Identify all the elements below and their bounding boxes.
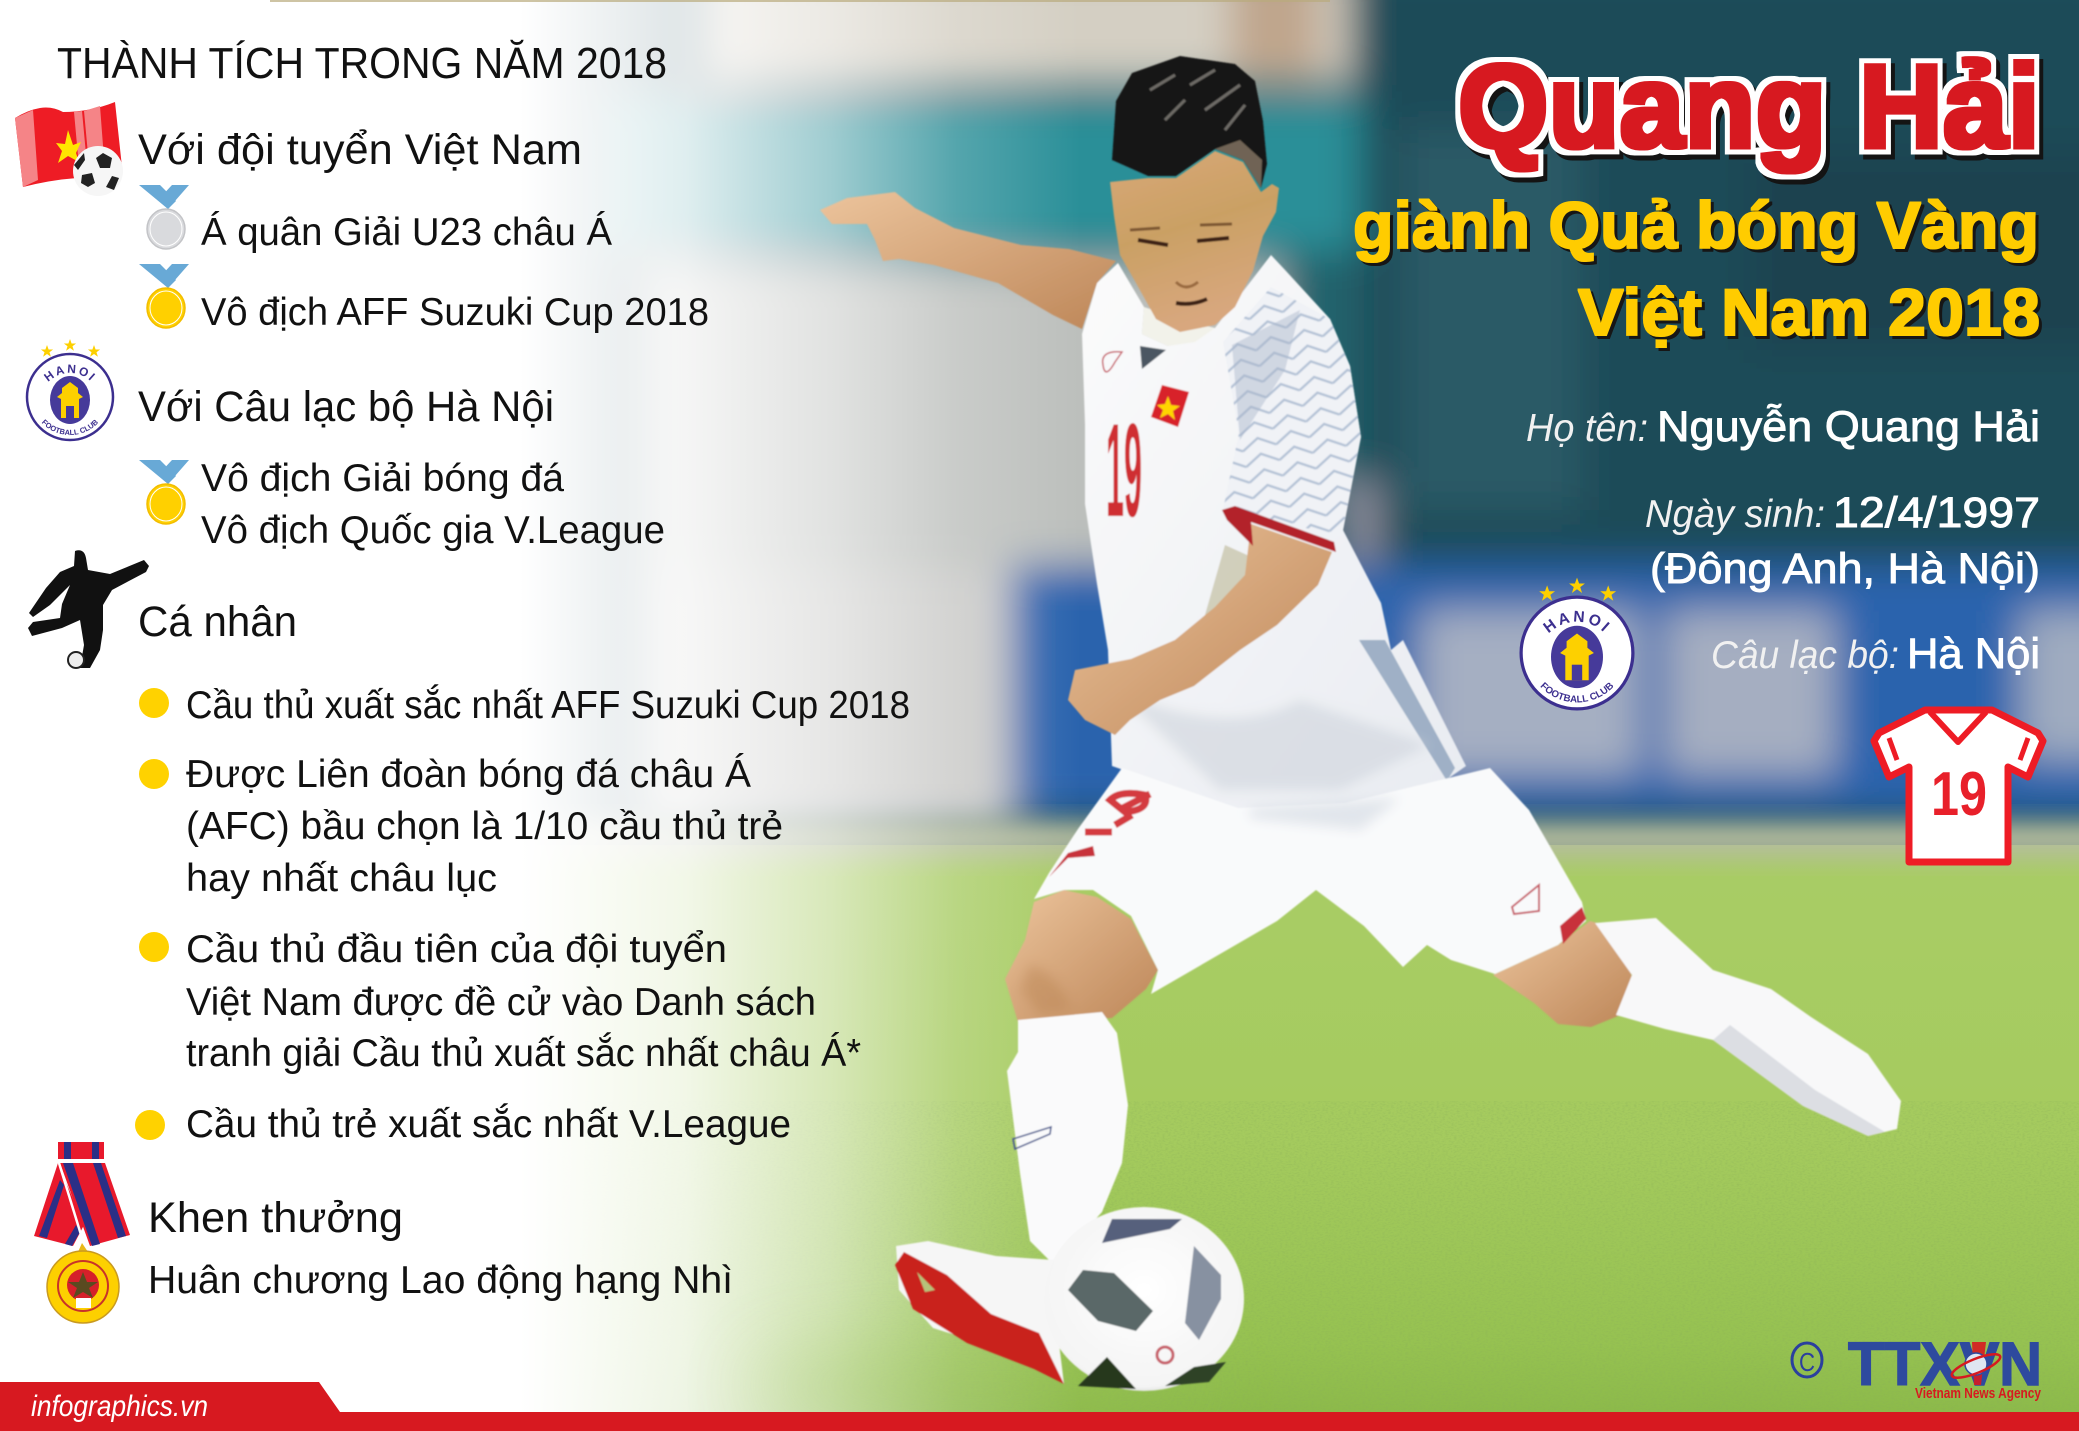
face [1110,151,1279,332]
shirt shading and side stripe [1359,640,1455,781]
copyright and TTXVN logo: Vietnam News Agency [1915,1385,2042,1402]
icon: Hanoi FC crest: HANOI [44,364,96,382]
text: second class labour order: Huân chương Lao động hạng Nhì [148,1259,733,1302]
bullet: best young player V.League: Cầu thủ trẻ xuất sắc nhất V.League [186,1103,791,1146]
title: achievements in 2018: THÀNH TÍCH TRONG NĂM 2018 [57,39,667,88]
footer label: infographics.vn [31,1390,208,1423]
profile: date of birth: Ngày sinh: [1645,493,1825,536]
back leg [1493,921,1633,1027]
text: V.League title: Vô địch Quốc gia V.League [201,509,665,552]
profile: club: Câu lạc bộ: [1711,634,1899,677]
profile: club [1711,630,2040,678]
profile: full name: Họ tên: [1526,407,1648,450]
bullet: first Vietnamese nominee: Cầu thủ đầu tiên của đội tuyển [186,928,727,971]
heading: individual: Cá nhân [138,598,297,646]
shirt sleeve [1223,287,1361,536]
hair [1112,56,1267,188]
copyright and TTXVN logo: C [1799,1347,1815,1377]
profile: club: Hà Nội [1907,630,2040,678]
footer bar [0,1382,2079,1431]
heading: with national team: Với đội tuyển Việt Nam [138,126,582,174]
heading: with Hanoi club: Với Câu lạc bộ Hà Nội [138,383,554,431]
bullet: AFC top 10 young players [139,753,783,900]
neck and collar [1142,307,1215,346]
standing thigh [1005,890,1158,1022]
front arm [1068,524,1332,735]
text: U23 runner-up: Á quân Giải U23 châu Á [201,211,612,254]
sleeve hem [1222,506,1336,552]
bullet: first Vietnamese nominee: tranh giải Cầu thủ xuất sắc nhất châu Á* [186,1032,861,1075]
icon: gold medal V.League [139,460,189,524]
icon: Hanoi FC crest large: FOOTBALL CLUB [1540,682,1613,702]
subtitle: Việt Nam 2018 [1578,275,2040,349]
icon: footballer silhouette [28,550,149,668]
main title: Quang Hai: Quang Hải [1458,41,2040,173]
back sock and boot [1595,918,1901,1136]
standing sock [1007,1012,1128,1265]
icon: Hanoi FC crest [26,339,114,442]
icon: jersey number 19 [1874,710,2043,862]
subtitle [1353,188,2040,349]
icon: labour order medal [34,1142,130,1323]
icon: gold medal AFF [139,264,189,328]
profile: date of birth [1645,489,2040,593]
profile: date of birth: 12/4/1997 [1833,489,2040,537]
ball [1044,1207,1244,1391]
text: V.League title [201,457,665,552]
front boot [896,1241,1064,1384]
bullet: AFC top 10 young players: (AFC) bầu chọn là 1/10 cầu thủ trẻ [186,805,783,848]
icon: Hanoi FC crest: FOOTBALL CLUB [42,419,98,436]
icon: silver medal [139,185,189,249]
player photo: 19 [1106,397,1142,545]
text: AFF Suzuki Cup: Vô địch AFF Suzuki Cup 2018 [201,291,709,334]
bullet: AFC top 10 young players: Được Liên đoàn bóng đá châu Á [186,753,751,796]
icon: Hanoi FC crest large [1520,578,1634,710]
bullet: best player AFF: Cầu thủ xuất sắc nhất AFF Suzuki Cup 2018 [186,684,910,727]
flag badge [1151,385,1189,427]
icon: Hanoi FC crest large: HANOI [1542,610,1610,633]
raised arm [820,192,1116,329]
shirt [1082,255,1466,810]
heading: awards: Khen thưởng [148,1194,403,1242]
player photo [820,56,1901,1391]
shorts [1034,768,1586,994]
number on shorts [1085,793,1150,832]
bullet: first Vietnamese nominee: Việt Nam được đề cử vào Danh sách [186,981,816,1024]
text: V.League title: Vô địch Giải bóng đá [201,457,565,500]
bullet: first Vietnamese nominee [139,928,861,1075]
profile: date of birth: (Đông Anh, Hà Nội) [1650,545,2040,593]
icon: Vietnam flag with football [15,102,123,196]
copyright and TTXVN logo: TTXVN [1848,1330,2042,1398]
icon: jersey number 19: 19 [1931,760,1987,829]
subtitle: giành Quả bóng Vàng [1353,188,2039,262]
profile: full name: Nguyễn Quang Hải [1657,403,2040,451]
bullet: AFC top 10 young players: hay nhất châu lục [186,857,497,900]
